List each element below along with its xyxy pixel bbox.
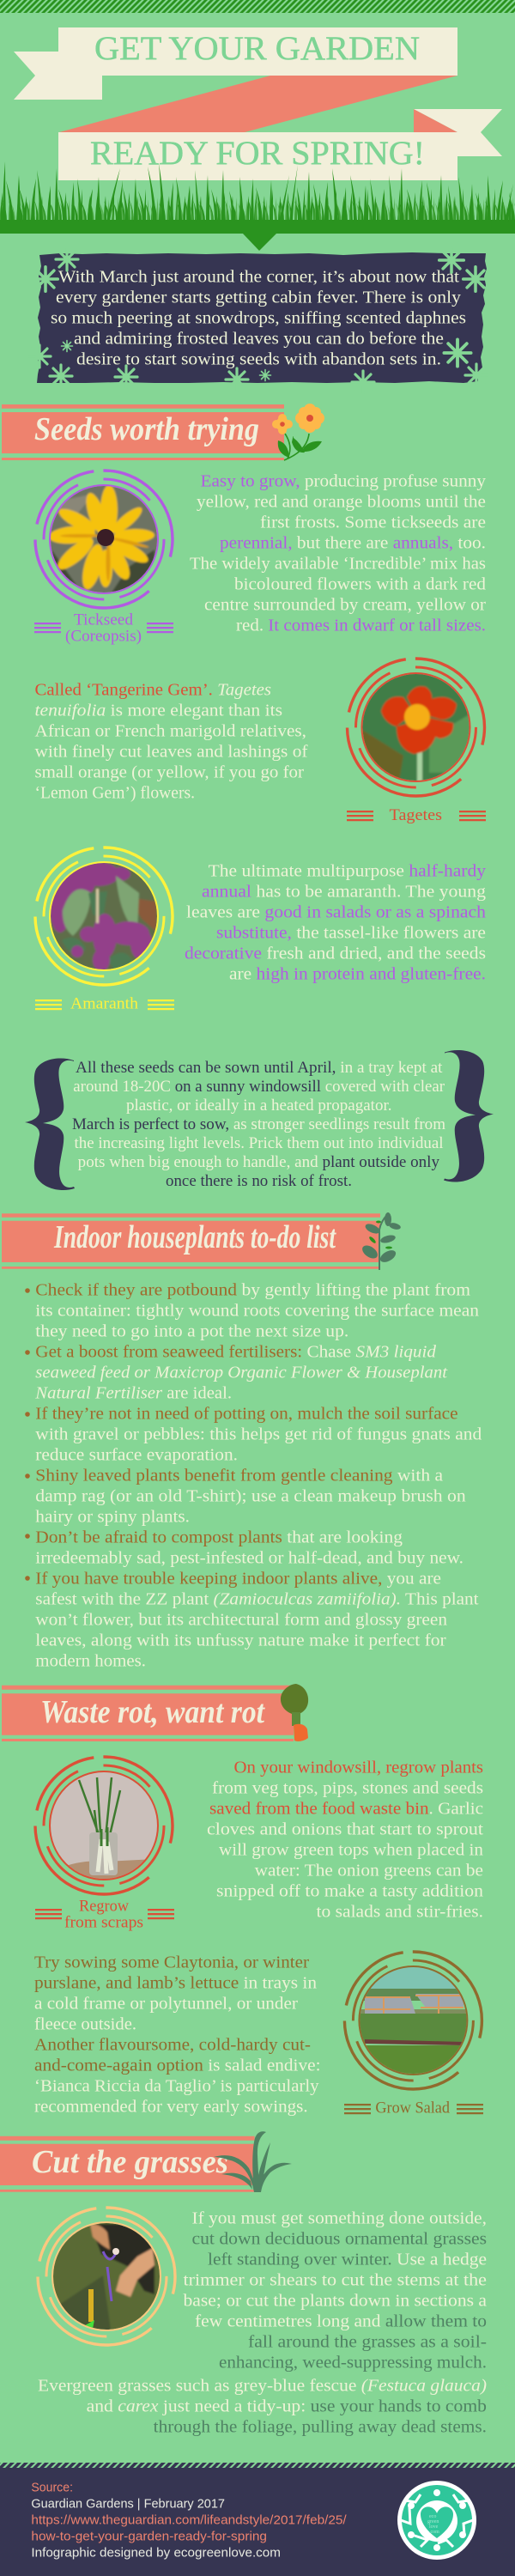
- logo badge: green: [427, 2519, 439, 2524]
- salad label: Grow Salad: [375, 2099, 450, 2117]
- logo badge: [397, 2481, 476, 2560]
- salad label: [344, 2099, 483, 2117]
- grasses text: enhancing, weed-suppressing mulch.: [219, 2353, 487, 2372]
- note text: [72, 1059, 445, 1190]
- list text: [34, 1280, 482, 1670]
- tickseed label: (Coreopsis): [65, 628, 142, 646]
- tagetes text: tenuifolia is more elegant than its: [34, 701, 282, 720]
- plant card: amaranth: [35, 848, 486, 1012]
- note text: once there is no risk of frost.: [166, 1172, 352, 1190]
- list text: If you have trouble keeping indoor plants alive, you are: [35, 1569, 441, 1588]
- tagetes text: small orange (or yellow, if you go for: [34, 762, 304, 781]
- regrow label: from scraps: [64, 1914, 143, 1932]
- source text: Source:: [31, 2481, 73, 2495]
- tagetes text: [34, 680, 308, 802]
- salad photo: [359, 1966, 470, 2075]
- note text: March is perfect to sow, as stronger seedlings result from: [72, 1115, 445, 1133]
- salad text: purslane, and lamb’s lettuce in trays in: [34, 1974, 317, 1993]
- list text: safest with the ZZ plant (Zamioculcas zamiifolia). This plant: [35, 1589, 479, 1608]
- intro text: and admiring frosted leaves you can do before the: [74, 330, 444, 348]
- heading ribbon: Indoor houseplants to-do list: [53, 1219, 336, 1255]
- grasses text: trimmer or shears to cut the stems at the: [184, 2270, 487, 2289]
- intro panel: [28, 248, 488, 393]
- grasses text: If you must get something done outside,: [192, 2208, 487, 2227]
- footer: [0, 2463, 515, 2576]
- regrow text: will grow green tops when placed in: [219, 1840, 483, 1859]
- heading ribbon: [0, 2136, 255, 2192]
- grass strip: [0, 161, 515, 234]
- grasses text: fall around the grasses as a soil-: [248, 2332, 487, 2351]
- amaranth text: leaves are good in salads or as a spinach: [186, 902, 486, 921]
- list text: irredeemably sad, pest-infested or half-dead, and buy new.: [35, 1548, 464, 1567]
- logo badge: love: [429, 2524, 439, 2530]
- grasses text: [38, 2208, 487, 2436]
- amaranth rings: [35, 848, 173, 985]
- list text: damp rag (or an old T-shirt); use a clean makeup brush on: [35, 1486, 466, 1505]
- source text: Infographic designed by ecogreenlove.com: [31, 2546, 281, 2561]
- source text: [31, 2481, 348, 2561]
- heading ribbon: [2, 1686, 294, 1741]
- leaf star decorations: [28, 248, 488, 393]
- amaranth photo: [51, 863, 157, 969]
- salad text: a cold frame or polytunnel, or under: [34, 1995, 298, 2014]
- amaranth label: [35, 994, 174, 1012]
- ribbon lower tail: [414, 109, 502, 156]
- grasses text: and carex just need a tidy-up: use your hands to comb: [87, 2397, 487, 2415]
- footer background: [0, 2468, 515, 2576]
- amaranth text: annual has to be amaranth. The young: [202, 882, 486, 901]
- title line 1: GET YOUR GARDEN: [94, 30, 420, 67]
- list text: hairy or spiny plants.: [35, 1507, 190, 1526]
- to-do list: [25, 1280, 482, 1670]
- icon: grass plant: [214, 2131, 292, 2192]
- salad rings: [344, 1952, 482, 2089]
- amaranth text: are high in protein and gluten-free.: [229, 964, 486, 983]
- tagetes rings: [347, 659, 484, 796]
- grasses text: few centimetres long and allow them to: [195, 2312, 487, 2330]
- section: seeds worth trying: [2, 404, 494, 1190]
- list text: with gravel or pebbles: this helps get rid of fungus gnats and: [35, 1425, 482, 1443]
- list text: seaweed feed or Maxicrop Organic Flower & Houseplant: [35, 1363, 447, 1382]
- source text: https://www.theguardian.com/lifeandstyle/2017/feb/25/: [31, 2513, 348, 2528]
- regrow text: water: The onion greens can be: [255, 1861, 483, 1880]
- tickseed text: yellow, red and orange blooms until the: [197, 493, 486, 512]
- heading ribbon: Cut the grasses: [32, 2144, 228, 2180]
- heading ribbon: Waste rot, want rot: [40, 1694, 265, 1730]
- tickseed rings: [35, 471, 173, 608]
- salad text: Try sowing some Claytonia, or winter: [34, 1953, 309, 1972]
- icon: right brace: [444, 1050, 494, 1182]
- regrow rings: [35, 1757, 173, 1894]
- tagetes label: Tagetes: [390, 806, 442, 824]
- intro text: every gardener starts getting cabin fever. There is only: [56, 289, 461, 307]
- icon: carrot: [281, 1684, 308, 1741]
- list text: Check if they are potbound by gently lifting the plant from: [35, 1280, 470, 1299]
- intro pointer arrow: [242, 233, 277, 251]
- amaranth text: [185, 861, 486, 983]
- list text: If they’re not in need of potting on, mulch the soil surface: [35, 1404, 458, 1423]
- tickseed text: bicoloured flowers with a dark red: [234, 575, 486, 594]
- grasses text: Evergreen grasses such as grey-blue fescue (Festuca glauca): [38, 2376, 487, 2395]
- list text: Natural Fertiliser are ideal.: [34, 1383, 232, 1402]
- amaranth text: substitute, the tassel-like flowers are: [216, 923, 486, 942]
- amaranth label: Amaranth: [70, 994, 139, 1012]
- section: waste rot, want rot: [2, 1684, 483, 2117]
- regrow text: snipped off to make a tasty addition: [216, 1881, 483, 1900]
- tickseed label: Tickseed: [74, 611, 133, 629]
- grass rings: [38, 2208, 175, 2345]
- heading ribbon: Seeds worth trying: [34, 411, 259, 447]
- list text: they need to go into a pot the next size up.: [35, 1321, 348, 1340]
- tickseed text: The widely available ‘Incredible’ mix has: [190, 555, 486, 574]
- plant card: regrow from scraps: [35, 1757, 483, 1932]
- sowing note in braces: [25, 1050, 494, 1190]
- list text: modern homes.: [35, 1651, 146, 1670]
- note text: the increasing light levels. Prick them out into individual: [74, 1134, 443, 1152]
- salad text: and-come-again option is salad endive:: [34, 2057, 321, 2075]
- salad text: recommended for very early sowings.: [34, 2098, 308, 2117]
- regrow text: cloves and onions that start to sprout: [207, 1820, 483, 1838]
- plant card: grow salad: [34, 1952, 483, 2117]
- tagetes text: Called ‘Tangerine Gem’. Tagetes: [34, 680, 271, 699]
- logo badge: .com: [429, 2530, 439, 2535]
- intro text: [51, 268, 466, 368]
- list text: won’t flower, but its architectural form and glossy green: [35, 1610, 447, 1629]
- tagetes text: ‘Lemon Gem’) flowers.: [34, 783, 195, 802]
- ribbon upper tail: [14, 52, 102, 100]
- tickseed text: centre surrounded by cream, yellow or: [204, 596, 486, 615]
- salad text: ‘Bianca Riccia da Taglio’ is particularly: [34, 2077, 319, 2096]
- icon: flowers: [272, 404, 324, 460]
- regrow text: saved from the food waste bin . Garlic: [209, 1799, 483, 1818]
- grass photo: [53, 2223, 160, 2330]
- bullets: [25, 1288, 30, 1581]
- heading ribbon: [2, 1213, 380, 1269]
- logo badge: eco: [429, 2514, 436, 2519]
- footer stripe band: [0, 2463, 515, 2468]
- ribbon upper: [58, 27, 457, 76]
- salad text: [34, 1953, 321, 2117]
- note text: around 18-20C on a sunny windowsill covered with clear: [73, 1078, 445, 1096]
- source text: how-to-get-your-garden-ready-for-spring: [31, 2530, 267, 2544]
- top stripe band: [0, 0, 515, 13]
- regrow text: to salads and stir-fries.: [316, 1902, 483, 1921]
- regrow text: On your windowsill, regrow plants: [233, 1758, 483, 1777]
- plant card: tickseed: [34, 471, 486, 646]
- list text: Shiny leaved plants benefit from gentle cleaning with a: [35, 1466, 443, 1485]
- tickseed text: Easy to grow, producing profuse sunny: [201, 472, 486, 491]
- tickseed text: [190, 472, 486, 635]
- grasses text: base; or cut the plants down in sections a: [184, 2291, 487, 2310]
- section: cut the grasses: [0, 2131, 487, 2436]
- list text: Don’t be afraid to compost plants that are looking: [35, 1528, 403, 1546]
- title line 2: READY FOR SPRING!: [90, 135, 425, 172]
- ribbon lower: [58, 132, 457, 180]
- icon: left brace: [25, 1058, 75, 1190]
- intro text: With March just around the corner, it’s about now that: [58, 268, 460, 286]
- tagetes photo: [360, 672, 472, 784]
- regrow photo: [51, 1772, 157, 1879]
- amaranth text: The ultimate multipurpose half-hardy: [209, 861, 486, 880]
- ribbon fold: [58, 76, 457, 132]
- section: indoor houseplants: [2, 1212, 482, 1670]
- icon: leafy sprig: [360, 1212, 402, 1270]
- tagetes text: African or French marigold relatives,: [34, 721, 306, 740]
- tickseed photo: [51, 486, 157, 592]
- list text: its container: tightly wound roots covering the surface mean: [35, 1301, 479, 1320]
- amaranth text: decorative fresh and dried, and the seeds: [185, 944, 486, 963]
- tickseed text: red. It comes in dwarf or tall sizes.: [236, 617, 486, 635]
- regrow text: from veg tops, pips, stones and seeds: [212, 1778, 483, 1797]
- source text: Guardian Gardens | February 2017: [31, 2497, 225, 2512]
- regrow label: Regrow: [79, 1898, 129, 1916]
- torn dark panel: [37, 252, 487, 383]
- list text: leaves, along with its unfussy nature make it perfect for: [35, 1631, 446, 1649]
- note text: plastic, or ideally in a heated propagator.: [126, 1097, 391, 1115]
- tagetes text: with finely cut leaves and lashings of: [34, 742, 308, 761]
- plant card: tagetes: [34, 659, 486, 824]
- regrow text: [207, 1758, 483, 1921]
- regrow label: [35, 1898, 174, 1932]
- list text: reduce surface evaporation.: [35, 1445, 238, 1464]
- note text: All these seeds can be sown until April, in a tray kept at: [76, 1059, 443, 1077]
- title ribbon banner: [14, 27, 502, 180]
- grasses text: cut down deciduous ornamental grasses: [192, 2229, 487, 2248]
- tickseed label: [34, 611, 173, 646]
- tagetes label: [347, 806, 486, 824]
- list text: Get a boost from seaweed fertilisers: Chase SM3 liquid: [35, 1342, 437, 1361]
- heading ribbon: [2, 404, 284, 460]
- tickseed text: perennial, but there are annuals, too.: [220, 534, 486, 553]
- grasses text: left standing over winter. Use a hedge: [208, 2250, 487, 2269]
- intro text: desire to start sowing seeds with abandon sets in.: [76, 350, 441, 368]
- grasses text: through the foliage, pulling away dead stems.: [154, 2417, 487, 2436]
- tickseed text: first frosts. Some tickseeds are: [260, 513, 486, 532]
- salad text: Another flavoursome, cold-hardy cut-: [34, 2036, 311, 2055]
- salad text: fleece outside.: [34, 2015, 136, 2034]
- note text: pots when big enough to handle, and plant outside only: [78, 1153, 439, 1171]
- intro text: so much peering at snowdrops, sniffing scented daphnes: [51, 309, 466, 327]
